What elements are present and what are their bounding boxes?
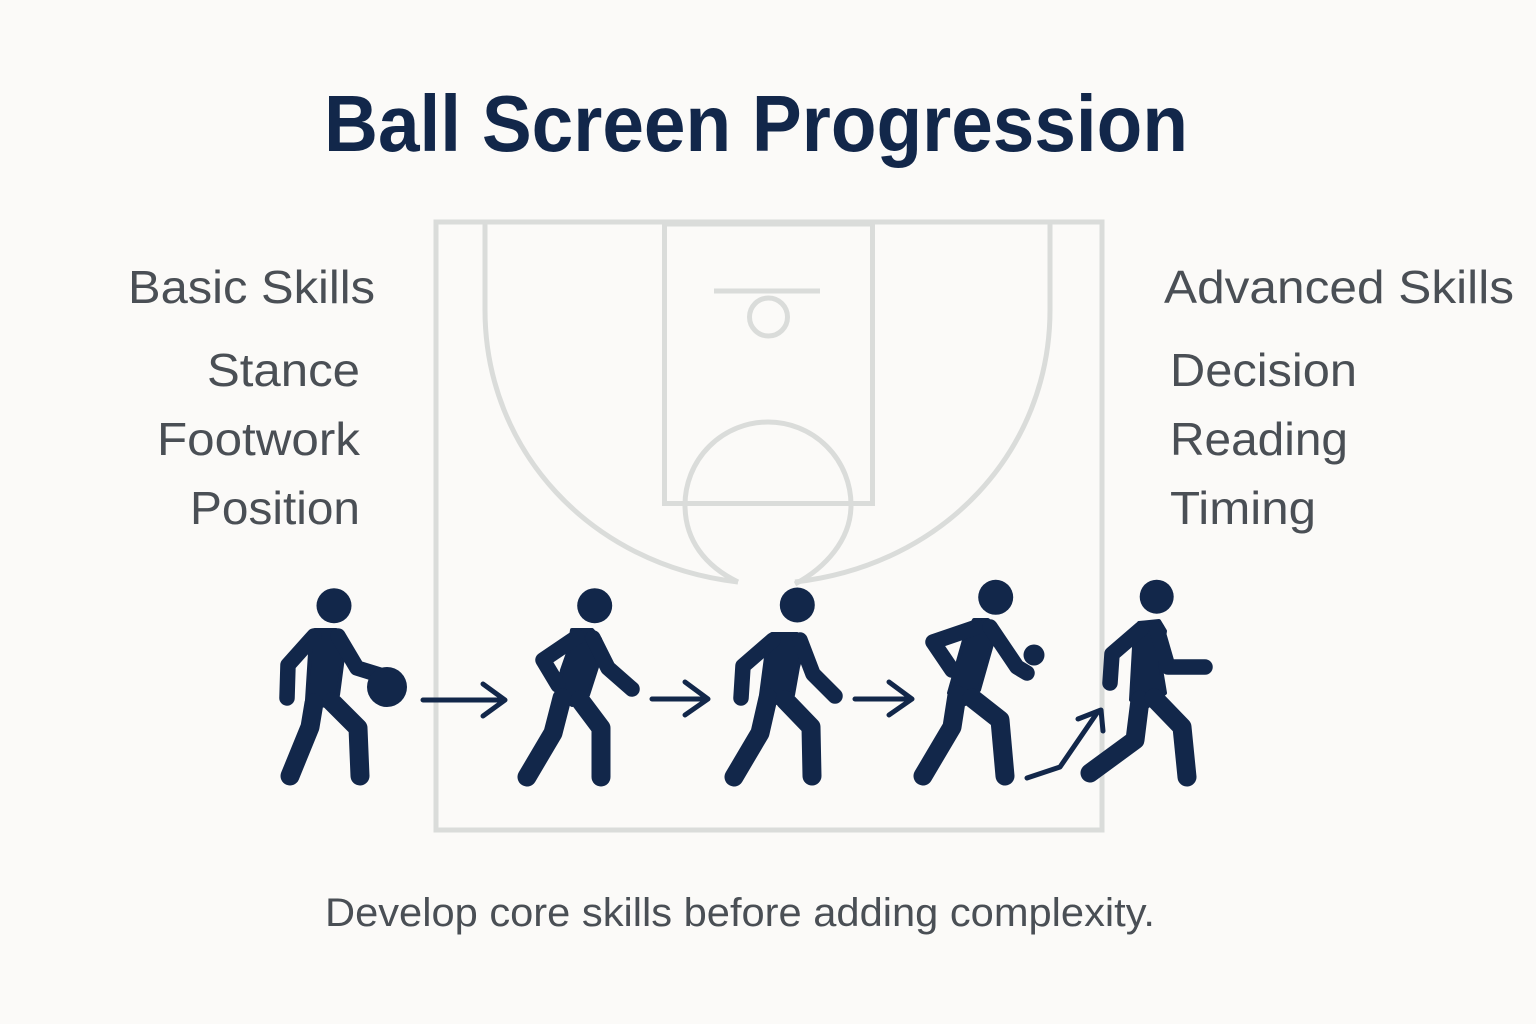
basketball half court diagram [436,222,1102,830]
panel: advanced skills [1164,261,1514,534]
footer caption: Develop core skills before adding complexity. [325,891,1155,935]
arrow 4 [1027,710,1103,778]
arrow 1 [423,684,505,716]
figure 2: player stepping [527,588,632,777]
figure 4: player catching ball [923,580,1044,776]
skill: footwork: Footwork [157,413,361,465]
heading: basic skills: Basic Skills [128,261,375,313]
arrow 3 [855,682,912,715]
figure 3: player walking [734,588,835,777]
skill: decision: Decision [1170,344,1357,396]
figure 5: player running [1090,580,1205,777]
skill: position: Position [190,482,360,534]
heading: advanced skills: Advanced Skills [1164,261,1514,313]
panel: basic skills [128,261,375,534]
arrow 2 [652,682,708,715]
skill: timing: Timing [1170,482,1316,534]
figure 1: player dribbling with ball [287,588,407,776]
skill: stance: Stance [207,344,360,396]
title: Ball Screen Progression [324,79,1188,168]
skill: reading: Reading [1170,413,1348,465]
